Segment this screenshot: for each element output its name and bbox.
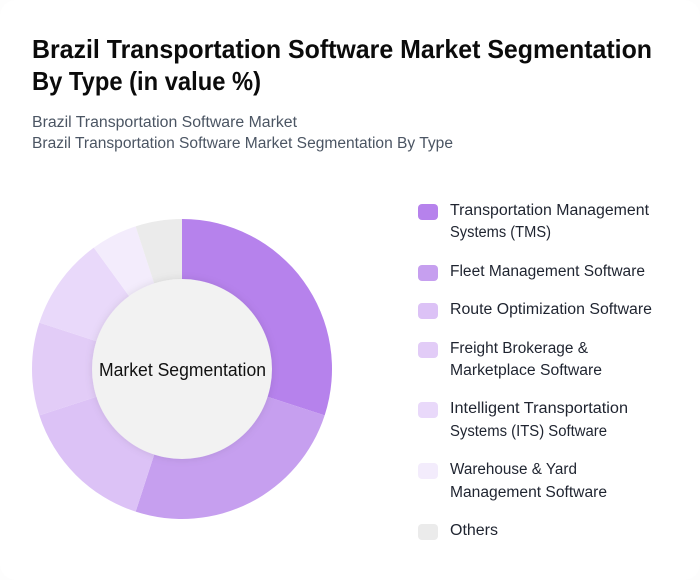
subtitle — [32, 114, 453, 152]
legend item: Freight Brokerage: Marketplace Software — [450, 362, 602, 379]
segment: Fleet Management Software — [136, 369, 325, 519]
legend item: Freight Brokerage: Freight Brokerage & — [450, 340, 589, 357]
legend item: Intelligent Transportation: Intelligent Transportation — [450, 400, 628, 417]
donut centre — [92, 279, 272, 459]
title — [32, 34, 652, 96]
legend item: Warehouse and Yard — [418, 461, 607, 501]
subtitle: Brazil Transportation Software Market Segmentation By Type — [32, 135, 453, 152]
centre label: Market Segmentation — [99, 360, 266, 380]
legend item: Warehouse and Yard: Warehouse & Yard — [450, 461, 577, 478]
legend item: TMS — [418, 202, 650, 241]
legend item: Intelligent Transportation: Systems (ITS) Software — [450, 423, 607, 440]
segment: Route Optimization Software — [39, 369, 182, 512]
segment: Transportation Management Systems (TMS) — [182, 219, 332, 415]
legend item: Others — [418, 522, 498, 540]
legend item: Others: Others — [450, 522, 498, 539]
title: Brazil Transportation Software Market Segmentation — [32, 34, 652, 64]
segment: Warehouse & Yard Management Software — [94, 226, 182, 369]
legend item: Intelligent Transportation — [418, 400, 628, 440]
title: By Type (in value %) — [32, 66, 261, 96]
segment: Others — [136, 219, 182, 369]
subtitle: Brazil Transportation Software Market — [32, 114, 298, 131]
legend item: TMS: Systems (TMS) — [450, 224, 551, 241]
legend item: Freight Brokerage — [418, 340, 602, 379]
legend item: Route Optimization: Route Optimization Software — [450, 301, 652, 318]
segment: Intelligent Transportation Systems (ITS) Software — [39, 248, 182, 369]
legend item: TMS: Transportation Management — [450, 202, 650, 219]
legend — [418, 202, 652, 540]
segment: Freight Brokerage & Marketplace Software — [32, 323, 182, 415]
legend item: Fleet Management: Fleet Management Software — [450, 263, 645, 280]
donut chart — [32, 219, 332, 519]
legend item: Warehouse and Yard: Management Software — [450, 484, 607, 501]
